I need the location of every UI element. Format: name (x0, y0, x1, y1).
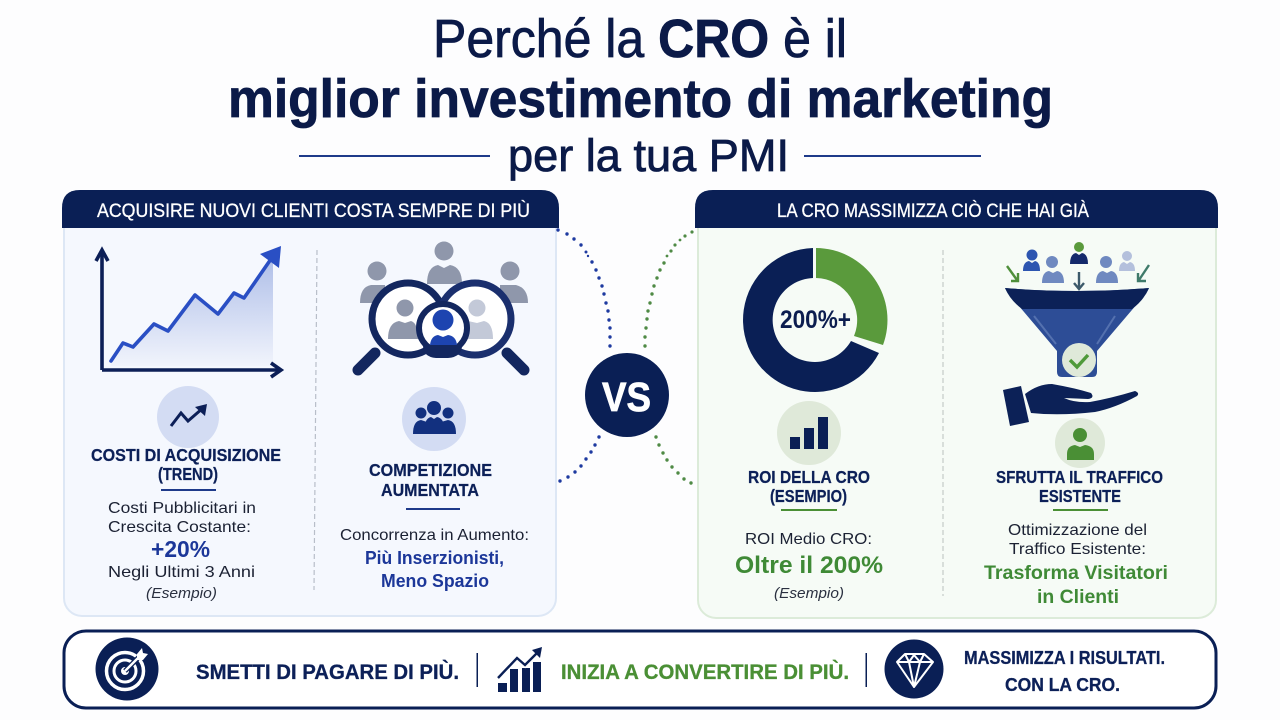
people entering funnel (1007, 242, 1149, 289)
donut chart: 200%+ (743, 248, 887, 392)
bottom call-to-action bar (64, 631, 1216, 708)
column: costi di acquisizione: (TREND) (158, 464, 218, 484)
column: competizione aumentata (340, 460, 529, 591)
column: costi di acquisizione: Negli Ultimi 3 Anni (108, 564, 255, 581)
column: costi di acquisizione: Costi Pubblicitari in (108, 500, 256, 517)
callout: massimizza i risultati: CON LA CRO. (1005, 675, 1120, 695)
icon: diamond (884, 640, 944, 698)
funnel body (1005, 288, 1149, 377)
icon: person badge (1055, 418, 1105, 468)
title (228, 9, 1053, 181)
title: Perché la CRO è il (433, 9, 847, 69)
column: ROI della CRO: ROI Medio CRO: (745, 531, 872, 548)
column: sfrutta il traffico: in Clienti (1037, 587, 1119, 608)
callout: massimizza i risultati (964, 648, 1165, 695)
column: sfrutta il traffico: ESISTENTE (1039, 486, 1121, 506)
column: costi di acquisizione: (Esempio) (146, 585, 217, 602)
column: costi di acquisizione: COSTI DI ACQUISIZIONE (91, 445, 281, 465)
callout: massimizza i risultati: MASSIMIZZA I RISULTATI. (964, 648, 1165, 668)
check badge (1062, 343, 1096, 377)
icon: bars badge (777, 401, 841, 465)
column: sfrutta il traffico: Ottimizzazione del (1008, 522, 1147, 539)
column: competizione aumentata: AUMENTATA (381, 480, 479, 500)
panel: acquisire nuovi clienti (62, 190, 559, 616)
column: sfrutta il traffico: Trasforma Visitatori (984, 563, 1168, 584)
panel header left (62, 190, 559, 228)
panel background right (698, 205, 1216, 618)
column: ROI della CRO: ROI DELLA CRO (748, 467, 870, 487)
panel: la CRO massimizza (695, 190, 1218, 618)
column: ROI della CRO (735, 467, 883, 602)
dotted connectors: green (643, 230, 694, 485)
panel background left (64, 205, 556, 616)
icon: funnel with people and hand (1003, 242, 1149, 426)
column: ROI della CRO: Oltre il 200% (735, 552, 883, 579)
column: ROI della CRO: (ESEMPIO) (770, 486, 847, 506)
icon: magnifying glasses over people (358, 242, 528, 370)
column: ROI della CRO: (Esempio) (774, 585, 844, 602)
icon: target (96, 638, 158, 700)
icon: growth bars (498, 647, 542, 692)
column: competizione aumentata: COMPETIZIONE (369, 460, 492, 480)
callout: smetti di pagare: SMETTI DI PAGARE DI PIÙ. (196, 660, 459, 684)
icon: group badge (402, 387, 466, 451)
column: competizione aumentata: Meno Spazio (381, 570, 489, 591)
dotted connectors: blue (556, 228, 612, 483)
column: costi di acquisizione: Crescita Costante: (108, 519, 251, 536)
icon: trend arrow badge (157, 386, 219, 448)
panel header left: ACQUISIRE NUOVI CLIENTI COSTA SEMPRE DI PIÙ (97, 199, 530, 222)
column: sfrutta il traffico: Traffico Esistente: (1009, 541, 1146, 558)
VS badge: VS (602, 374, 651, 420)
hand (1003, 386, 1029, 426)
line chart: rising costs (96, 246, 281, 377)
column: competizione aumentata: Concorrenza in Aumento: (340, 527, 529, 544)
column: costi di acquisizione (91, 445, 281, 602)
column: competizione aumentata: Più Inserzionisti, (365, 547, 504, 568)
column: sfrutta il traffico (984, 467, 1168, 608)
title: per la tua PMI (508, 130, 789, 181)
panel header right: LA CRO MASSIMIZZA CIÒ CHE HAI GIÀ (777, 199, 1089, 222)
title: miglior investimento di marketing (228, 69, 1053, 129)
column: sfrutta il traffico: SFRUTTA IL TRAFFICO (996, 467, 1163, 487)
VS badge (585, 353, 669, 437)
donut chart: 200%+: 200%+ (780, 306, 851, 334)
column: costi di acquisizione: +20% (151, 536, 210, 562)
panel header right (695, 190, 1218, 228)
callout: inizia a convertire: INIZIA A CONVERTIRE DI PIÙ. (561, 660, 849, 684)
